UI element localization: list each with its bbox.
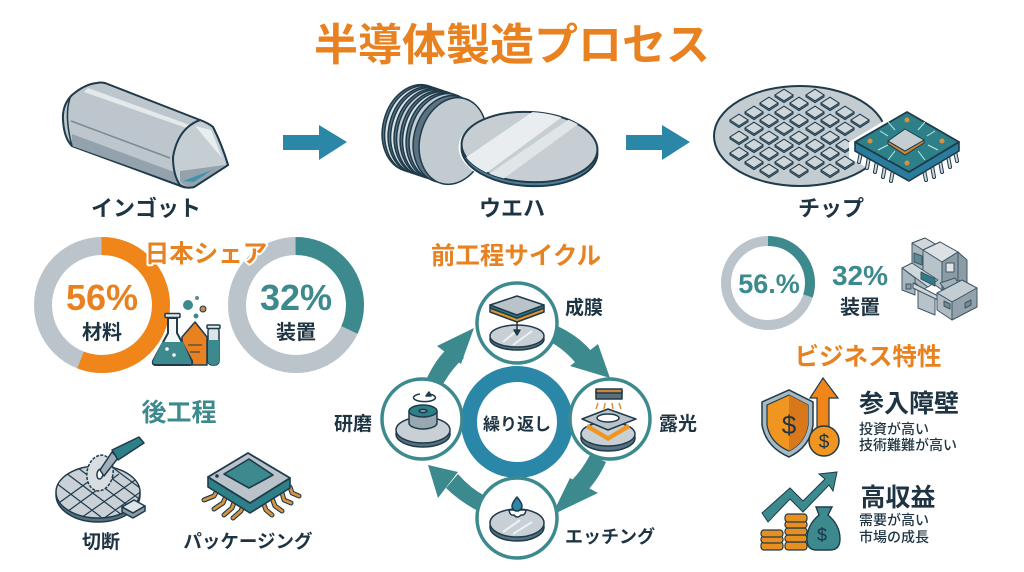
label: deposition: 成膜 [565,293,603,320]
heading: front-end cycle: 前工程サイクル [431,237,601,272]
donut chart: equipment 32%: 32% [260,277,332,318]
heading: back-end process: 後工程 [141,393,217,429]
label: ingot: インゴット [91,191,201,223]
heading: Japan share: 日本シェア [145,235,267,270]
arrow: ingot to wafer [283,125,347,160]
icon: rising chart, coins and money bag: $ [817,525,827,545]
donut chart: 56.% [726,241,810,325]
icon: shield, arrow and coin: $ [819,432,830,453]
icon: shield, arrow and coin: $ [782,410,797,440]
arrow: etching to polishing [428,465,485,510]
step: exposure [570,379,650,459]
stat: equipment 32% [832,260,888,320]
block: barrier to entry [859,384,959,455]
donut chart: 56.%: 56.% [738,269,800,299]
icon: rising chart, coins and money bag [761,472,840,550]
cycle diagram [382,283,650,558]
icon: wafer stack and wafer [381,84,598,188]
label: etching: エッチング [565,523,655,549]
label: exposure: 露光 [659,409,697,436]
label: wafer: ウエハ [479,191,545,223]
donut chart: equipment 32%: 装置 [276,316,316,345]
block: high profitability [859,478,936,547]
title: 半導体製造プロセス [314,9,710,73]
label: packaging: パッケージング [183,528,313,554]
label: chip: チップ [798,191,864,223]
icon: flask and materials [153,296,220,365]
icon: packaged chip [204,453,299,518]
icon: silicon ingot [63,82,228,188]
block: high profitability: 需要が高い [859,510,929,530]
center ring [469,374,565,470]
step: deposition [477,283,557,363]
donut chart: materials 56% [43,246,161,364]
icon: shield, arrow and coin [762,378,839,457]
stat: equipment 32%: 装置 [840,291,880,320]
arrow: polishing to deposition [426,328,474,386]
stat: equipment 32%: 32% [832,260,888,291]
block: barrier to entry: 参入障壁 [859,384,959,420]
block: barrier to entry: 投資が高い [859,419,929,439]
heading: business characteristics: ビジネス特性 [794,338,942,373]
block: high profitability: 市場の成長 [859,527,929,547]
icon: diced wafer and chip [714,86,965,190]
step: etching [477,478,557,558]
icon: dicing saw [56,437,150,524]
donut chart: materials 56%: 56% [66,277,138,318]
donut chart: equipment 32% [237,246,355,364]
block: barrier to entry: 技術難難が高い [859,435,957,455]
label: dicing: 切断 [82,527,120,554]
block: high profitability: 高収益 [860,478,936,514]
step: polishing [382,379,462,459]
arrow: wafer to chip [626,125,690,160]
arrow: exposure to etching [552,455,606,515]
icon: manufacturing equipment [902,238,977,320]
donut chart: materials 56%: 材料 [82,316,122,345]
arrow: deposition to exposure [547,325,610,378]
label: repeat: 繰り返し [483,410,551,435]
label: polishing: 研磨 [334,409,372,436]
